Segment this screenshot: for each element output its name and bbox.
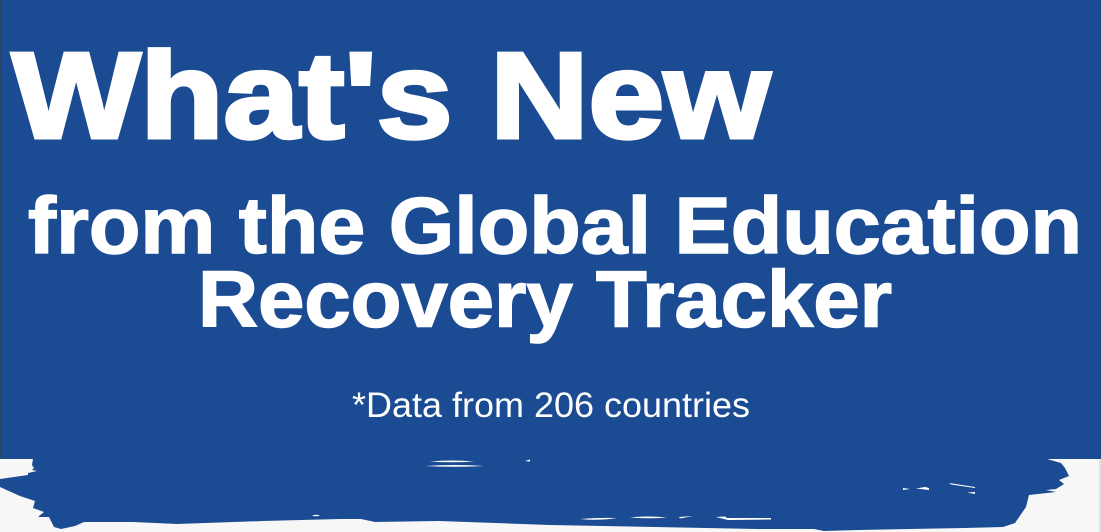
subtitle line 2: Recovery Tracker <box>198 254 892 344</box>
right edge <box>1099 459 1101 532</box>
footnote: *Data from 206 countries <box>352 386 750 425</box>
left edge <box>0 0 1 459</box>
brush stroke <box>0 459 1069 531</box>
title: What's New <box>12 28 771 164</box>
subtitle line 1: from the Global Education <box>28 181 1082 270</box>
